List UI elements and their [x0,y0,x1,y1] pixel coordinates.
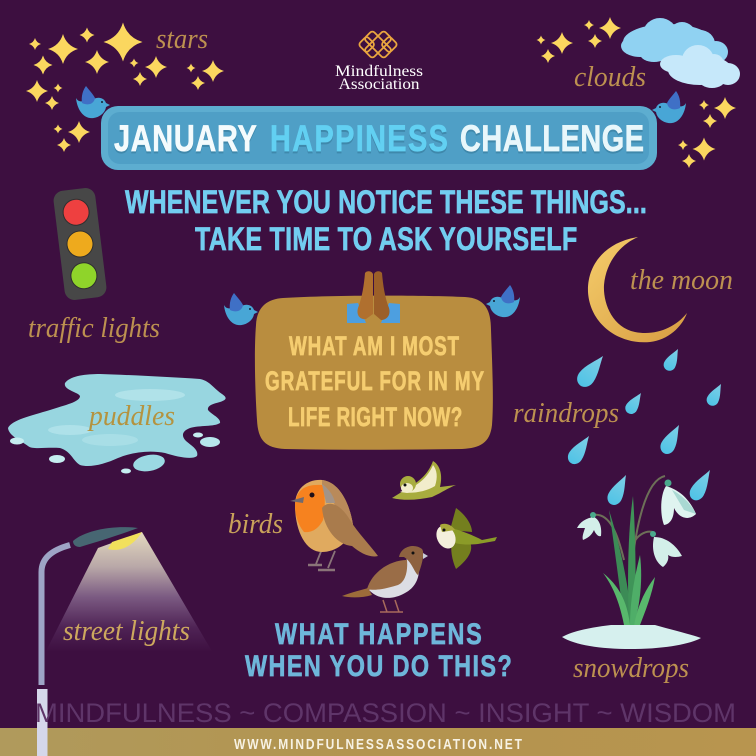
bulb glow [108,532,142,550]
label: the moon: the moon [630,265,733,296]
logo text: Mindfulness [335,63,423,80]
closing question line 1: WHAT HAPPENS [275,617,482,651]
clouds [621,18,740,88]
logo knot [358,25,398,64]
banner inner [108,112,649,164]
label: stars: stars [156,24,208,55]
card text line 3: LIFE RIGHT NOW? [288,402,462,432]
title word: Happiness: HAPPINESS [270,119,448,160]
light beam [43,532,213,657]
flying bird olive 2 [433,508,497,569]
label: street lights: street lights [63,616,190,647]
closing question line 2: WHEN YOU DO THIS? [245,649,512,683]
icon: traffic light [52,187,108,301]
logo [335,25,423,80]
subheading line 2: TAKE TIME TO ASK YOURSELF [195,222,577,258]
footer bar [0,728,756,756]
bird right of card [486,285,520,317]
front cloud [660,45,740,88]
bird left of card [224,293,258,325]
flowers [661,486,696,525]
card text line 1: WHAT AM I MOST [289,331,459,361]
label: traffic lights: traffic lights [28,313,160,344]
footer url: WWW.MINDFULNESSASSOCIATION.NET [234,736,523,752]
icon: moon [588,237,687,342]
title banner [101,106,657,170]
sparrow [342,546,428,612]
icon: puddle [8,374,226,474]
icon: praying hands [347,271,400,323]
label: birds: birds [228,509,283,540]
label: snowdrops: snowdrops [573,653,689,684]
label: clouds: clouds [574,62,646,93]
leaves [609,510,632,625]
stars top right [536,17,736,168]
lamp head [73,527,138,547]
label: puddles: puddles [87,401,175,432]
icon: snowdrops [562,476,701,649]
title word: January: JANUARY [114,119,257,160]
label: raindrops: raindrops [513,398,619,429]
center card [255,296,493,450]
subheading line 1: WHENEVER YOU NOTICE THESE THINGS... [125,185,647,221]
banner shape [101,106,657,170]
bird top right [652,91,686,123]
pole base [37,689,48,756]
icon: street light [42,527,213,685]
card text line 2: GRATEFUL FOR IN MY [265,366,484,396]
watermark values: MINDFULNESS ~ COMPASSION ~ INSIGHT ~ WISDOM [35,698,736,728]
logo text line 2: Association [338,76,420,93]
title word: Challenge: CHALLENGE [460,119,644,160]
robin [290,480,378,570]
back cloud [621,18,728,63]
snow mound [562,625,701,649]
flying bird olive 1 [392,461,456,500]
stars top left [26,22,224,152]
stems [593,476,665,575]
lamp pole [42,545,70,685]
bird top left [76,86,110,118]
raindrops [565,346,726,508]
card shape [255,296,493,450]
